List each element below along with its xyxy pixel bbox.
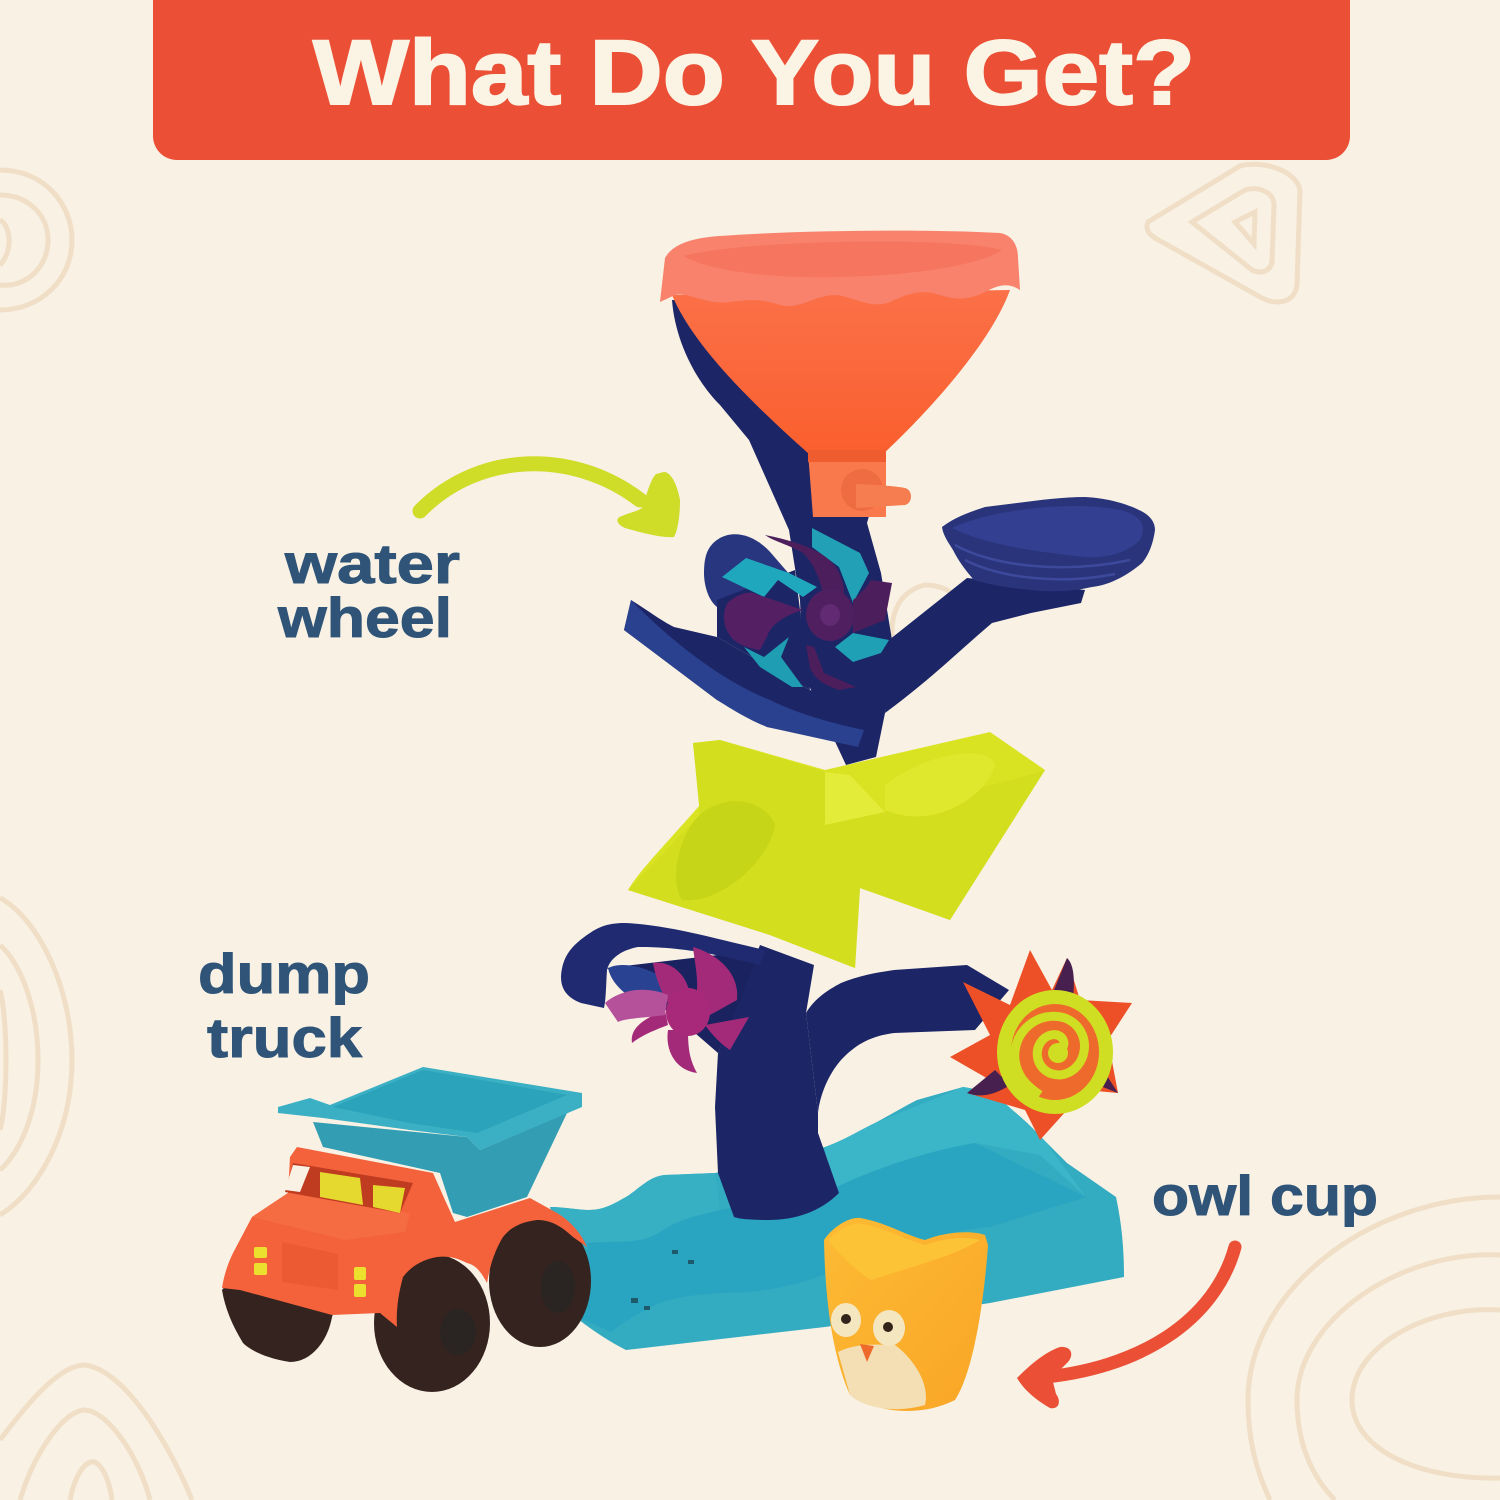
label: owl cup: owl cup (1152, 1164, 1378, 1227)
dump truck (222, 1067, 591, 1392)
label: water wheel (277, 532, 460, 649)
funnel rim (660, 231, 1020, 306)
spout knob (841, 469, 911, 511)
red and yellow spiral wheel (950, 950, 1132, 1140)
top purple and teal water wheel (722, 528, 892, 690)
front left wheel (222, 1275, 340, 1362)
orange cab and chassis (222, 1147, 587, 1327)
drain holes (631, 1250, 694, 1310)
navy lower trunk and branches (561, 923, 1009, 1220)
grille (282, 1242, 338, 1290)
dark blue ramp (624, 600, 864, 747)
navy upper trunk, strut and nest branch (672, 300, 1085, 765)
lower purple wheel (605, 947, 749, 1073)
owl cup (824, 1218, 988, 1411)
orange funnel (660, 231, 1020, 517)
label: water wheel: water (284, 532, 460, 595)
rear wheel (489, 1215, 591, 1347)
header banner (153, 0, 1350, 160)
front right wheel (374, 1254, 490, 1392)
wheel hubs (440, 1261, 575, 1355)
teal dump bed (278, 1067, 582, 1217)
funnel bowl (672, 290, 1010, 455)
water table toy (550, 231, 1155, 1350)
yellow-green chute (628, 732, 1045, 968)
headlights (254, 1247, 366, 1297)
funnel spout (808, 452, 886, 517)
label: water wheel: wheel (277, 586, 452, 649)
label: dump truck (198, 942, 370, 1069)
windshield (285, 1163, 413, 1213)
label: dump truck: dump (198, 942, 370, 1005)
nest basket (942, 497, 1155, 591)
title: What Do You Get? (313, 22, 1195, 124)
blue base tray (550, 1087, 1124, 1350)
label: dump truck: truck (207, 1006, 363, 1069)
arrow: to water wheel (420, 464, 680, 537)
arrow: to owl cup (1017, 1247, 1235, 1408)
